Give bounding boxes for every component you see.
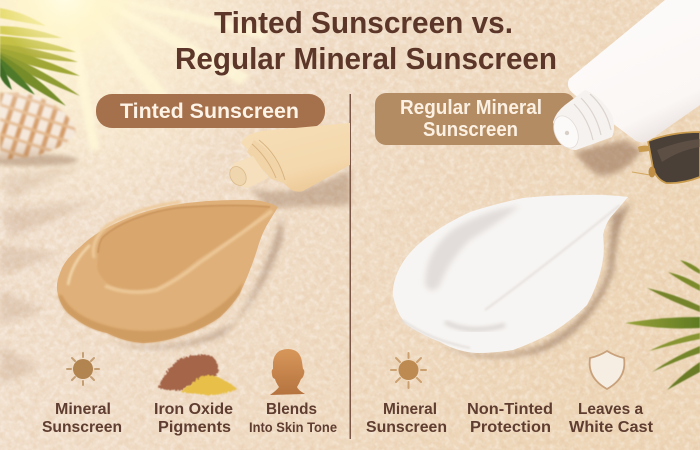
title: Tinted Sunscreen vs. bbox=[214, 5, 513, 40]
label: iron oxide pigments: Pigments bbox=[158, 419, 231, 436]
heading pill: tinted sunscreen bbox=[96, 94, 325, 128]
palm frond top left bbox=[0, 8, 80, 106]
heading pill: regular mineral sunscreen: Regular Mineral bbox=[400, 97, 542, 119]
tinted cream swatch bbox=[57, 200, 283, 349]
label: mineral sunscreen: Mineral bbox=[383, 401, 437, 418]
white sunscreen tube bbox=[549, 0, 700, 152]
label: iron oxide pigments bbox=[154, 401, 233, 436]
sun glare bbox=[0, 0, 295, 225]
heading pill: tinted sunscreen: Tinted Sunscreen bbox=[120, 100, 299, 123]
label: mineral sunscreen bbox=[366, 401, 447, 436]
label: iron oxide pigments: Iron Oxide bbox=[154, 401, 233, 418]
tinted sunscreen tube bbox=[227, 123, 350, 208]
panel: tinted sunscreen bbox=[42, 94, 350, 436]
center divider bbox=[350, 94, 351, 439]
icon: sun bbox=[391, 353, 426, 388]
label: blends into skin tone bbox=[249, 401, 337, 435]
white cream swatch bbox=[393, 195, 632, 357]
label: non-tinted protection bbox=[467, 401, 553, 436]
palm frond bottom right bbox=[625, 260, 700, 390]
label: mineral sunscreen: Mineral bbox=[55, 401, 111, 418]
panel: regular mineral sunscreen bbox=[366, 0, 700, 436]
icon: shield bbox=[590, 351, 624, 389]
sunglasses bbox=[632, 132, 700, 183]
label: blends into skin tone: Into Skin Tone bbox=[249, 420, 337, 435]
icon: sun bbox=[67, 353, 99, 385]
label: leaves a white cast bbox=[569, 401, 654, 436]
label: mineral sunscreen bbox=[42, 401, 122, 436]
icon: head silhouette bbox=[270, 349, 305, 395]
palm shadows on sand bbox=[0, 165, 100, 385]
heading pill: regular mineral sunscreen bbox=[375, 93, 575, 145]
title: Regular Mineral Sunscreen bbox=[175, 41, 557, 76]
label: non-tinted protection: Protection bbox=[470, 419, 551, 436]
label: leaves a white cast: Leaves a bbox=[578, 401, 643, 418]
label: blends into skin tone: Blends bbox=[266, 401, 317, 418]
shadow under white tube bbox=[575, 140, 642, 176]
label: mineral sunscreen: Sunscreen bbox=[366, 419, 447, 436]
label: mineral sunscreen: Sunscreen bbox=[42, 419, 122, 436]
heading pill: regular mineral sunscreen: Sunscreen bbox=[423, 119, 518, 141]
seashell bbox=[0, 93, 78, 166]
sun flare over palm bbox=[0, 0, 135, 65]
title bbox=[175, 5, 557, 76]
icon: iron oxide pigment piles bbox=[158, 355, 237, 395]
label: non-tinted protection: Non-Tinted bbox=[467, 401, 553, 418]
label: leaves a white cast: White Cast bbox=[569, 419, 654, 436]
